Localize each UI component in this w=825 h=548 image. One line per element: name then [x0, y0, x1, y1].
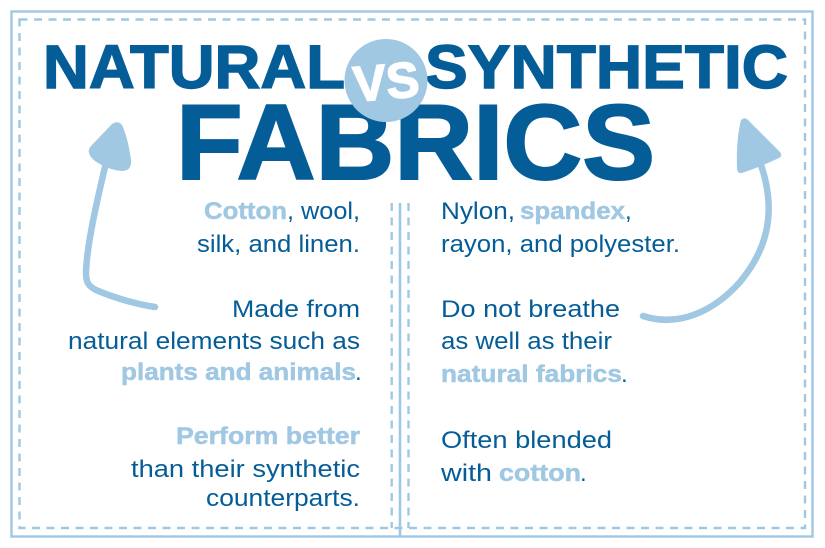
- natural origin: Made from: [232, 296, 360, 323]
- synthetic fibres list: spandex: [520, 198, 626, 225]
- natural performance: Perform better: [176, 423, 360, 450]
- natural origin: [68, 296, 362, 386]
- natural performance: [131, 423, 360, 512]
- vs badge: VS: [351, 51, 421, 113]
- natural fibres list: silk, and linen.: [197, 231, 360, 258]
- synthetic fibres list: [441, 198, 680, 258]
- arrow: right, pointing up to synthetic: [643, 118, 781, 320]
- synthetic breathability: Do not breathe: [441, 296, 620, 323]
- title: natural: NATURAL: [43, 33, 345, 101]
- title: fabrics: FABRICS: [176, 82, 655, 202]
- natural fibres list: Cotton: [204, 198, 287, 225]
- synthetic blends: [440, 427, 612, 487]
- natural performance: than their synthetic: [131, 456, 360, 483]
- natural fibres list: , wool,: [287, 198, 360, 225]
- synthetic blends: .: [580, 460, 587, 487]
- synthetic fibres list: Nylon,: [441, 198, 515, 225]
- natural origin: natural elements such as: [68, 328, 360, 355]
- text block: natural fabrics: [68, 198, 362, 512]
- natural origin: .: [355, 359, 362, 386]
- synthetic breathability: .: [621, 361, 628, 388]
- synthetic blends: cotton: [499, 460, 581, 487]
- synthetic fibres list: rayon, and polyester.: [441, 231, 680, 258]
- natural origin: plants and animals: [121, 359, 356, 386]
- synthetic blends: with: [440, 460, 492, 487]
- synthetic breathability: [441, 296, 628, 388]
- synthetic fibres list: ,: [625, 198, 632, 225]
- text block: synthetic fabrics: [440, 198, 680, 487]
- synthetic breathability: natural fabrics: [441, 361, 622, 388]
- natural fibres list: [197, 198, 360, 258]
- natural performance: counterparts.: [206, 485, 360, 512]
- vs badge: [344, 39, 428, 122]
- title: synthetic: SYNTHETIC: [425, 33, 788, 101]
- synthetic blends: Often blended: [441, 427, 612, 454]
- arrow: left, pointing up to natural: [86, 122, 155, 307]
- synthetic breathability: as well as their: [441, 328, 612, 355]
